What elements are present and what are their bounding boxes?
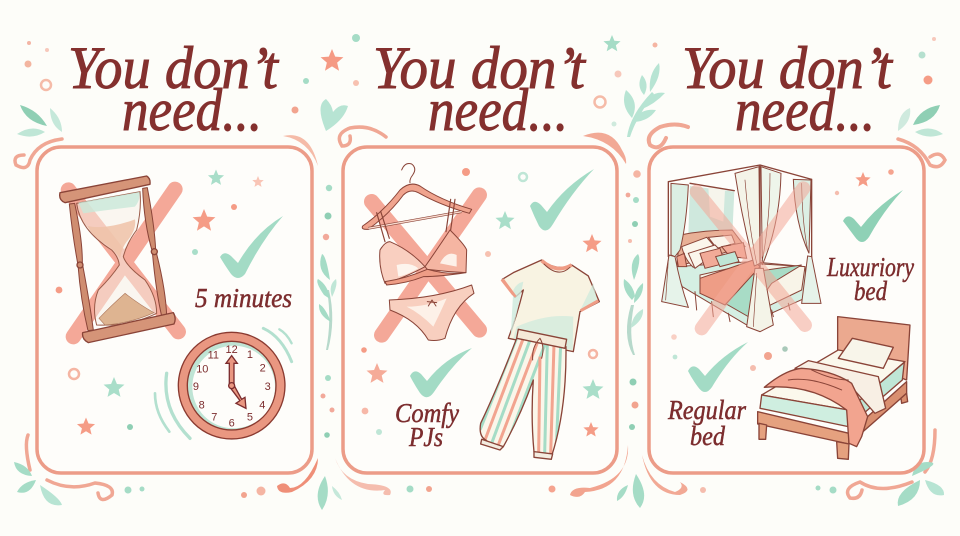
decorations: column gutters	[317, 170, 643, 438]
stars and dots	[671, 169, 894, 371]
title: column 1	[68, 35, 279, 143]
icon: wall clock: 9	[193, 381, 199, 393]
icon: wall clock: 10	[196, 363, 208, 375]
title: column 2	[373, 35, 586, 143]
regular bed	[758, 317, 910, 459]
icon: wall clock	[155, 328, 292, 439]
pyjama top and trousers	[480, 260, 599, 459]
decorations: swirls around the panels	[14, 124, 945, 510]
icon: wall clock: 3	[265, 381, 271, 393]
icon: check mark	[410, 348, 472, 397]
panel: comfy PJs instead of lingerie	[343, 147, 617, 473]
title: column 3	[682, 35, 893, 143]
label: Comfy PJs	[395, 398, 459, 452]
title: column 1: You don’t	[68, 35, 279, 101]
title: column 2: need...	[428, 77, 568, 143]
icon: wall clock: 8	[199, 399, 205, 411]
label: Luxuriory bed	[826, 252, 914, 306]
title: column 2: You don’t	[373, 35, 586, 101]
title: column 3: need...	[735, 77, 875, 143]
label: Regular bed	[667, 395, 746, 451]
icon: check mark	[843, 190, 903, 242]
panel: regular bed instead of luxury bed	[649, 147, 924, 473]
icon: check mark	[530, 169, 594, 231]
title: column 3: You don’t	[682, 35, 893, 101]
label: Luxuriory bed: Luxuriory	[826, 252, 914, 282]
title: column 1: need...	[122, 77, 262, 143]
icon: wall clock: 2	[260, 363, 266, 375]
label: Regular bed: bed	[690, 421, 725, 451]
icon: wall clock: 12	[226, 344, 238, 356]
label: Comfy PJs: PJs	[408, 422, 443, 452]
stars and dots	[56, 170, 264, 435]
panel frame	[343, 147, 617, 473]
hourglass with cross	[60, 176, 178, 343]
icon: wall clock: 11	[208, 349, 219, 361]
icon: check mark	[220, 216, 283, 278]
icon: wall clock: 6	[229, 418, 235, 430]
icon: wall clock: 7	[211, 412, 217, 424]
decorations: top	[17, 34, 943, 137]
canopy bed with cross	[662, 165, 821, 332]
icon: wall clock: 1	[247, 349, 253, 361]
panel frame	[649, 147, 924, 473]
icon: check mark	[688, 342, 748, 392]
icon: wall clock: 4	[259, 399, 265, 411]
label: 5 minutes: 5 minutes	[195, 283, 292, 313]
label: Luxuriory bed: bed	[854, 276, 887, 306]
label: Regular bed: Regular	[667, 395, 746, 425]
panel frame	[37, 147, 312, 473]
lingerie on hanger with cross	[362, 163, 479, 341]
label: Comfy PJs: Comfy	[395, 398, 459, 428]
panel: 5 minutes instead of an hour	[37, 147, 312, 473]
icon: wall clock: 5	[247, 412, 253, 424]
stars and dots	[361, 168, 603, 436]
